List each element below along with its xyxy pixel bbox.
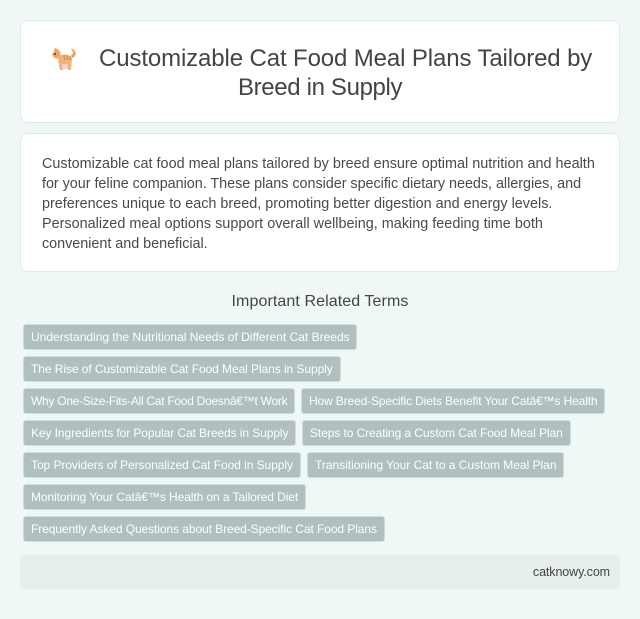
footer source: catknowy.com <box>533 565 610 579</box>
tag 7: Top Providers of Personalized Cat Food in Supply <box>31 458 293 472</box>
tag list <box>23 324 605 542</box>
tag 4: How Breed-Specific Diets Benefit Your Catâ€™s Health <box>309 394 597 408</box>
description text: Personalized meal options support overall wellbeing, making feeding time both <box>42 216 543 232</box>
tag 9 <box>23 484 306 510</box>
title line 2: Breed in Supply <box>238 74 402 101</box>
tag 6 <box>302 420 571 446</box>
tag 10: Frequently Asked Questions about Breed-Specific Cat Food Plans <box>31 522 377 536</box>
panel: description <box>20 133 620 272</box>
tag 3: Why One-Size-Fits-All Cat Food Doesnâ€™t Work <box>31 394 287 408</box>
footer bar <box>20 555 620 589</box>
tag 8 <box>307 452 564 478</box>
description text <box>42 156 595 252</box>
description text: preferences unique to each breed, promoting better digestion and energy levels. <box>42 196 552 212</box>
tag 4 <box>301 388 605 414</box>
description text: Customizable cat food meal plans tailored by breed ensure optimal nutrition and health <box>42 156 595 172</box>
panel: title card <box>20 20 620 123</box>
tag 9: Monitoring Your Catâ€™s Health on a Tailored Diet <box>31 490 298 504</box>
tag 5 <box>23 420 296 446</box>
tag 10 <box>23 516 385 542</box>
tag 5: Key Ingredients for Popular Cat Breeds in Supply <box>31 426 288 440</box>
description text: for your feline companion. These plans consider specific dietary needs, allergies, and <box>42 176 581 192</box>
tag 3 <box>23 388 295 414</box>
tag 6: Steps to Creating a Custom Cat Food Meal Plan <box>310 426 563 440</box>
tag 1: Understanding the Nutritional Needs of Different Cat Breeds <box>31 330 350 344</box>
tag 7 <box>23 452 301 478</box>
tag 8: Transitioning Your Cat to a Custom Meal Plan <box>315 458 556 472</box>
heading: related terms: Important Related Terms <box>232 293 408 310</box>
icon: cat <box>52 48 76 70</box>
title line 1: Customizable Cat Food Meal Plans Tailored by <box>99 45 592 72</box>
tag 1 <box>23 324 357 350</box>
description text: convenient and beneficial. <box>42 236 208 252</box>
tag 2: The Rise of Customizable Cat Food Meal Plans in Supply <box>31 362 333 376</box>
tag 2 <box>23 356 341 382</box>
